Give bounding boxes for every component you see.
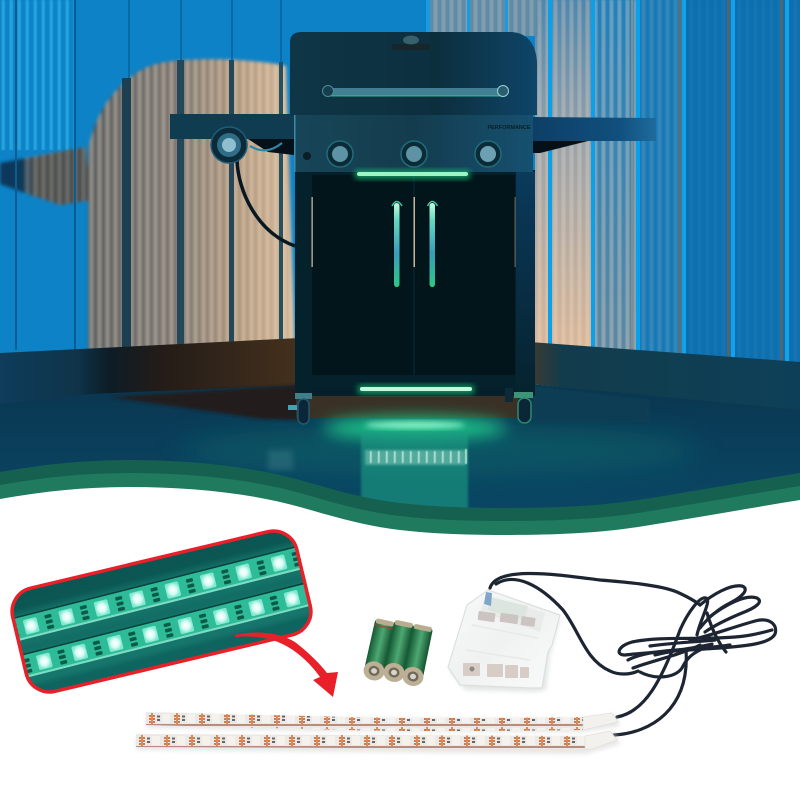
side shelf right <box>533 117 656 141</box>
lead to strip 1 <box>617 598 708 717</box>
cable lower lead <box>496 579 638 674</box>
wall seams right <box>548 0 789 361</box>
photo: grill on lit garage floor <box>0 0 800 540</box>
brand label: PERFORMANCE <box>487 125 531 131</box>
LED strip 1 <box>146 712 620 732</box>
floor right of grill <box>533 386 650 423</box>
wall above lid <box>426 0 538 36</box>
coil loop second <box>705 597 759 632</box>
brown floor beneath grill <box>296 388 518 418</box>
battery box <box>448 590 560 692</box>
side shelf left <box>170 114 294 139</box>
lead to strip 2 <box>614 650 686 735</box>
wave band upper <box>0 460 800 800</box>
dark wedge behind grill <box>110 385 300 420</box>
grill <box>170 32 656 424</box>
skirting wall left <box>0 338 300 405</box>
LED strip close-up 2 <box>22 579 309 684</box>
white lower panel <box>0 487 800 800</box>
gas hose <box>237 160 295 246</box>
cable upper lead <box>490 573 700 605</box>
bottom rail <box>312 376 516 388</box>
doors <box>312 175 413 375</box>
knobs <box>303 141 501 167</box>
battery 3 <box>401 623 434 688</box>
batteries <box>362 618 434 688</box>
warm light right <box>535 0 800 365</box>
corrugated wall <box>0 0 800 365</box>
LED strips product <box>136 712 620 754</box>
cabinet body <box>295 170 535 396</box>
battery 2 <box>382 619 415 684</box>
lid <box>290 32 537 115</box>
side burner knob <box>211 127 247 163</box>
upper LED strip glow <box>355 170 470 179</box>
LED strip 2 <box>136 731 620 754</box>
floor <box>0 384 800 540</box>
floor reflection <box>268 432 468 510</box>
control panel <box>294 115 533 172</box>
green floor glow <box>323 417 507 439</box>
wave band lower <box>0 473 800 800</box>
LED strip close-up 1 <box>14 542 302 649</box>
teal floor sheen <box>180 424 700 476</box>
warm light patch left <box>0 59 295 352</box>
battery 1 <box>362 618 396 682</box>
wall seams left <box>15 0 283 350</box>
arrow: red curved pointer <box>235 633 338 697</box>
skirting wall right <box>530 342 800 412</box>
lid handle <box>322 86 508 96</box>
coil tie strand <box>707 613 726 652</box>
bright left wall stripes <box>0 0 75 150</box>
door handles <box>392 202 438 287</box>
cables <box>490 573 776 735</box>
wheels <box>288 388 533 424</box>
lid badge <box>392 36 430 50</box>
coil lower strands <box>628 640 730 677</box>
coil loop upper <box>700 586 745 628</box>
callout: LED close-up <box>10 529 313 694</box>
lower LED strip glow <box>358 385 474 394</box>
coil loop right <box>619 620 776 655</box>
right wall blue falloff <box>683 0 800 365</box>
door gap highlights <box>312 197 516 267</box>
